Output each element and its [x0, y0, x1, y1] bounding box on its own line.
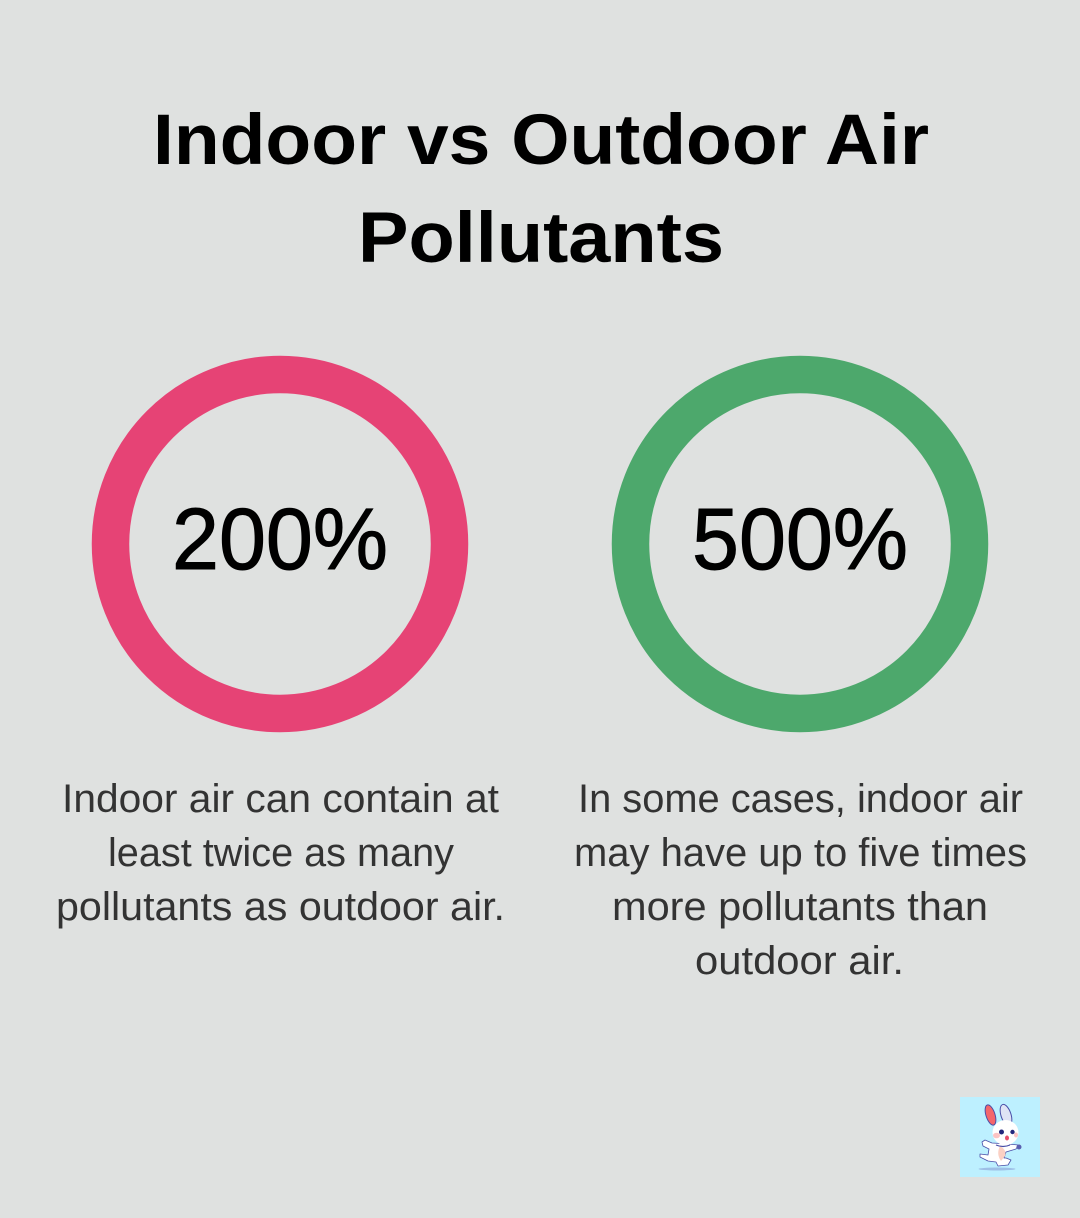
description: up to five times more pollutants: may have up to five times	[574, 831, 1027, 875]
title: Pollutants	[358, 199, 724, 278]
description: twice as many pollutants	[56, 777, 505, 929]
green ring	[630, 374, 970, 714]
icon: running rabbit logo	[960, 1097, 1040, 1177]
pink ring	[110, 374, 450, 714]
description: up to five times more pollutants: more pollutants than	[612, 885, 988, 929]
number: 500%: 500%	[692, 491, 908, 588]
title: Indoor vs Outdoor Air	[153, 101, 929, 180]
title	[153, 101, 929, 278]
description: up to five times more pollutants	[574, 777, 1027, 983]
panel: 500% statistic	[574, 374, 1027, 983]
number: 200%: 200%	[172, 491, 388, 588]
description: twice as many pollutants: least twice as many	[108, 831, 454, 875]
panel: 200% statistic	[56, 374, 505, 929]
description: twice as many pollutants: Indoor air can contain at	[62, 777, 499, 821]
description: twice as many pollutants: pollutants as outdoor air.	[56, 885, 505, 929]
description: up to five times more pollutants: outdoor air.	[695, 939, 904, 983]
description: up to five times more pollutants: In some cases, indoor air	[578, 777, 1023, 821]
